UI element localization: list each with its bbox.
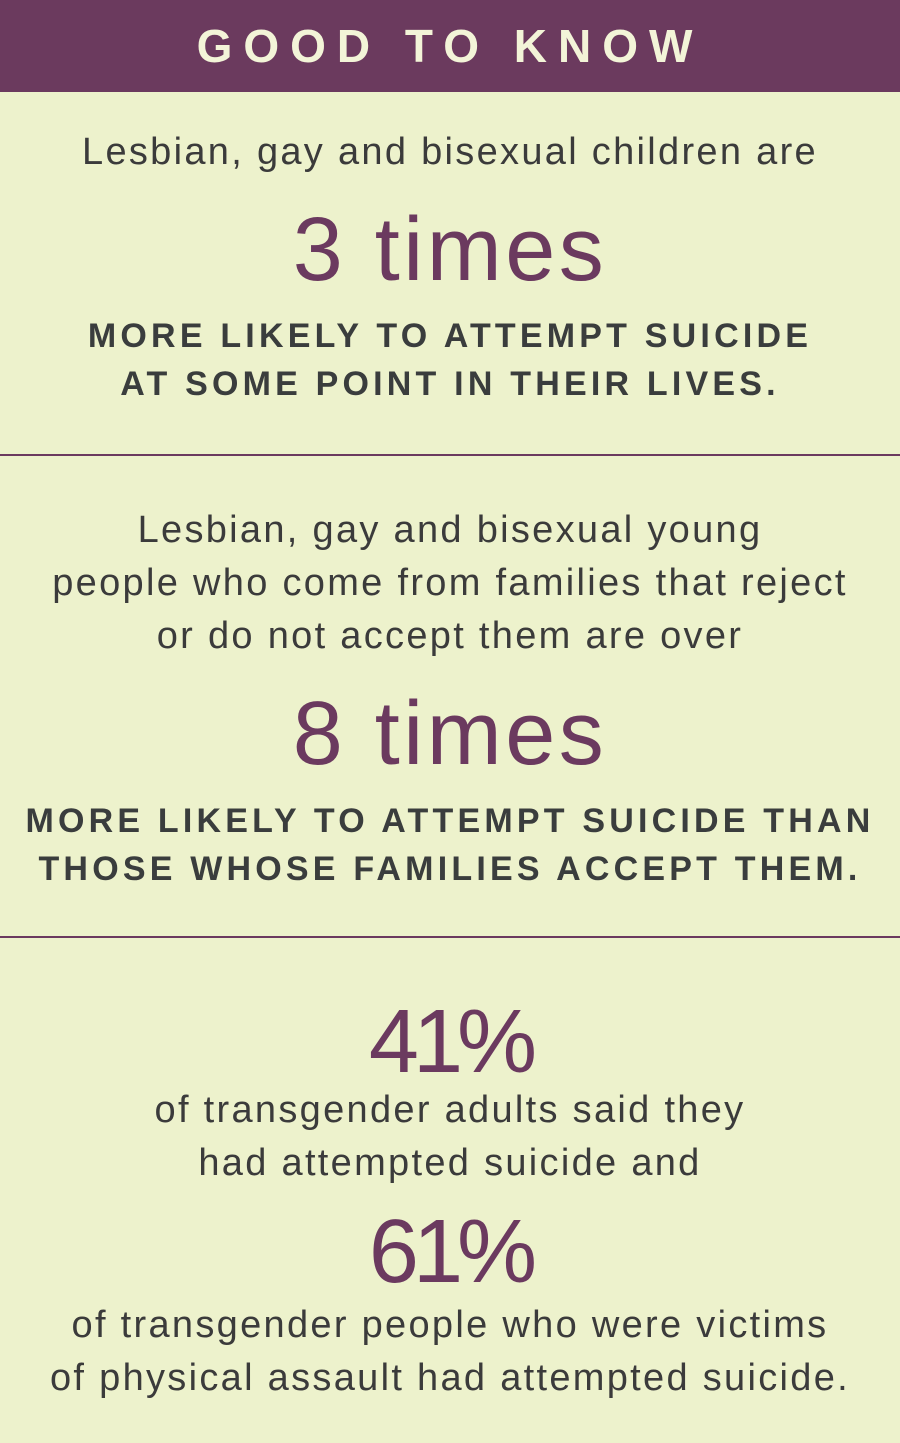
big number: 61%: 61%: [369, 1202, 531, 1302]
text 61%: of transgender people who were victims: [72, 1304, 828, 1346]
caps statement 1: MORE LIKELY TO ATTEMPT SUICIDE: [88, 317, 812, 355]
lead text 1: Lesbian, gay and bisexual children are: [82, 131, 818, 173]
text 61%: [50, 1304, 850, 1399]
text 41%: [155, 1089, 745, 1184]
header bar: [0, 0, 900, 92]
caps statement 2: [25, 802, 875, 888]
big number: 3 times: 3 times: [293, 200, 607, 300]
big number: 41%: 41%: [369, 992, 531, 1092]
caps statement 2: MORE LIKELY TO ATTEMPT SUICIDE THAN: [25, 802, 875, 840]
panel: stat 2: [25, 509, 875, 888]
caps statement 2: THOSE WHOSE FAMILIES ACCEPT THEM.: [38, 850, 862, 888]
title: GOOD TO KNOW: [197, 20, 703, 72]
lead text 2: Lesbian, gay and bisexual young: [138, 509, 762, 551]
caps statement 1: [88, 317, 812, 403]
lead text 2: or do not accept them are over: [157, 615, 743, 657]
lead text 2: people who come from families that reject: [52, 562, 848, 604]
caps statement 1: AT SOME POINT IN THEIR LIVES.: [120, 365, 780, 403]
panel: stat 3: [50, 992, 850, 1399]
big number: 8 times: 8 times: [293, 684, 607, 784]
lead text 2: [52, 509, 848, 657]
panel: stat 1: [82, 131, 818, 403]
text 41%: had attempted suicide and: [198, 1142, 702, 1184]
text 41%: of transgender adults said they: [155, 1089, 745, 1131]
text 61%: of physical assault had attempted suicide.: [50, 1357, 850, 1399]
